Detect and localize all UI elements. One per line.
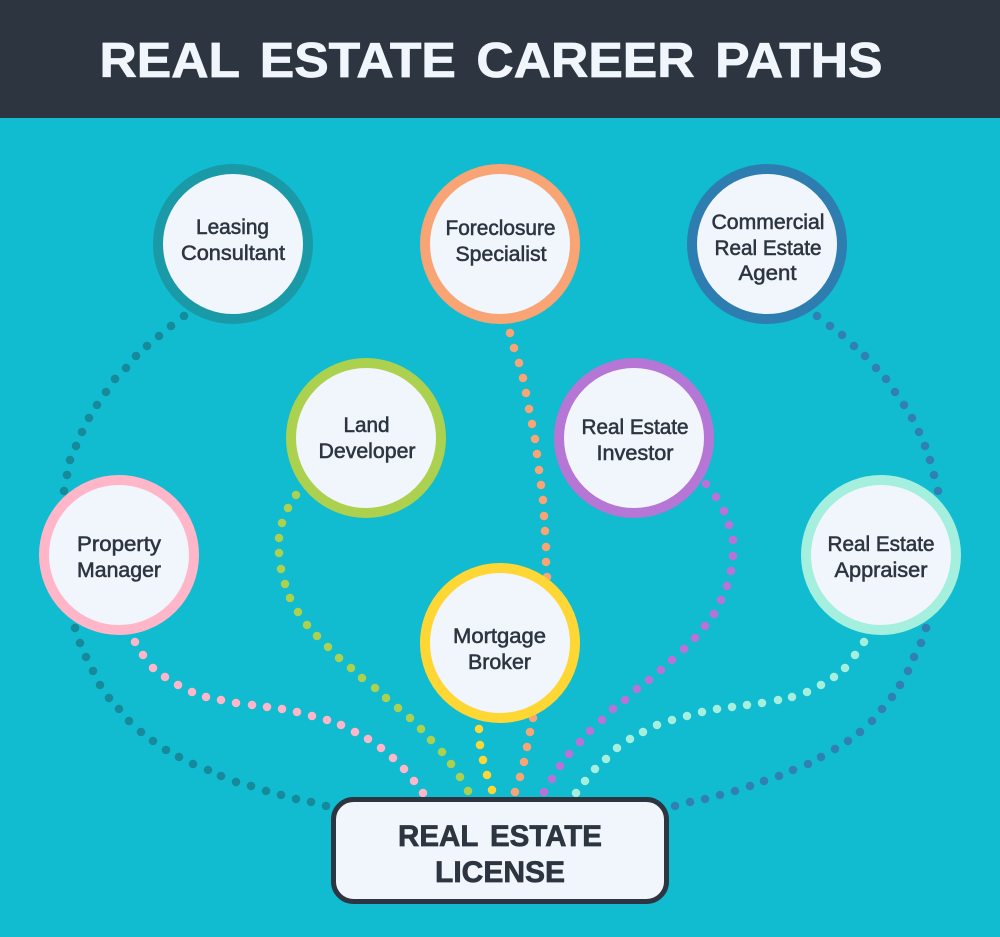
connector: real estate investor to license (544, 484, 733, 792)
node: commercial real estate agent (692, 169, 842, 319)
node: property manager: Manager (77, 559, 161, 582)
node: real estate appraiser (806, 480, 956, 630)
node: mortgage broker: Mortgage (453, 625, 546, 648)
node: leasing consultant (158, 169, 308, 319)
node: foreclosure specialist (425, 169, 575, 319)
node: real estate investor: Investor (596, 442, 674, 465)
connector: mortgage broker to license (479, 729, 492, 790)
node: property manager: Property (77, 533, 162, 556)
connector: foreclosure specialist to license (510, 333, 547, 792)
node: mortgage broker: Broker (468, 651, 531, 674)
connector: leasing consultant to license (64, 316, 326, 806)
connector: land developer to license (279, 495, 468, 791)
node: property manager (44, 480, 194, 630)
dotted connectors (64, 316, 938, 806)
connector: commercial agent to license (675, 316, 938, 806)
node: real estate appraiser: Real Estate (828, 533, 934, 556)
node: land developer: Developer (318, 440, 416, 463)
connector: real estate appraiser to license (576, 642, 864, 793)
node: foreclosure specialist: Specialist (456, 243, 547, 266)
node: leasing consultant: Consultant (181, 242, 285, 265)
title: REAL ESTATE CAREER PATHS (100, 33, 882, 88)
node: commercial real estate agent: Real Estate (714, 237, 822, 260)
box: real estate license: LICENSE (435, 856, 565, 889)
box: real estate license (334, 800, 666, 902)
connector: property manager to license (135, 642, 423, 793)
node: real estate investor: Real Estate (582, 416, 688, 439)
node: real estate appraiser: Appraiser (834, 559, 928, 582)
node: leasing consultant: Leasing (196, 216, 269, 239)
node: land developer (291, 363, 441, 513)
header band (0, 0, 1000, 118)
box: real estate license: REAL ESTATE (398, 820, 602, 853)
node: land developer: Land (344, 414, 390, 437)
node: real estate investor (559, 363, 709, 513)
node: commercial real estate agent: Commercial (712, 211, 824, 234)
node: foreclosure specialist: Foreclosure (446, 217, 556, 240)
node: mortgage broker (425, 568, 575, 718)
node: commercial real estate agent: Agent (738, 262, 797, 285)
